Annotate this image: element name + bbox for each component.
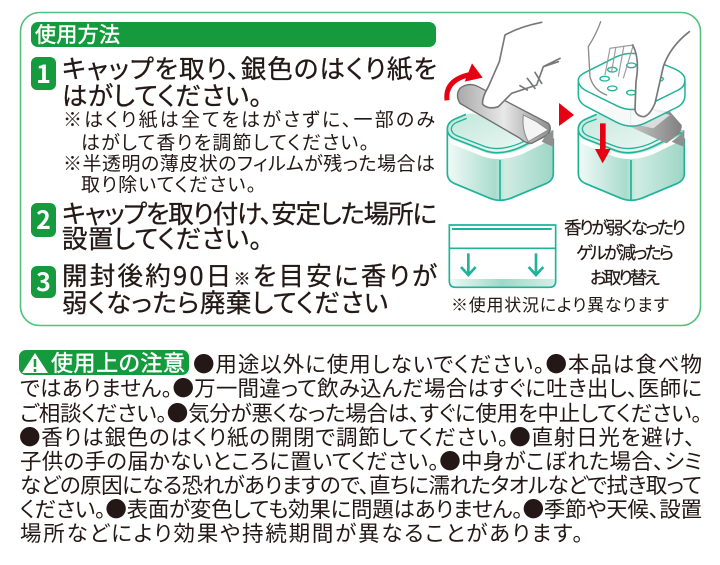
step 1 notes: ※はくり紙は全てをはがさずに、一部のみ: [63, 105, 435, 132]
icon: warning triangle: [22, 353, 48, 373]
precautions text: などの原因になる恐れがありますので、直ちに濡れたタオルなどで拭き取って: [20, 469, 702, 500]
badge: usage precautions: 使用上の注意: [51, 346, 185, 378]
replacement guidance text: ゲルが減ったら: [576, 240, 674, 265]
replacement guidance text: お取り替え: [590, 265, 660, 290]
step 2 badge: [31, 201, 56, 237]
step 1 notes: [63, 105, 435, 197]
step 1 notes: ※半透明の薄皮状のフィルムが残った場合は: [63, 149, 435, 176]
step 2 text: 設置してください。: [62, 219, 262, 256]
step 1 notes: 取り除いてください。: [81, 170, 256, 197]
step 2 text: キャップを取り付け、安定した場所に: [62, 194, 437, 231]
precautions text: ではありません。●万一間違って飲み込んだ場合はすぐに吐き出し、医師に: [20, 372, 702, 403]
step 1 notes: はがして香りを調節してください。: [81, 128, 369, 155]
icon: hand lifting cap: [588, 22, 689, 117]
footnote: ※使用状況により異なります: [451, 291, 669, 316]
precautions text: ください。●表面が変色しても効果に問題はありません。●季節や天候、設置: [20, 493, 702, 524]
replacement guidance text: [564, 215, 686, 290]
step 3 badge: [31, 263, 56, 299]
step 2 badge: 2: [36, 201, 51, 237]
step 1 badge: 1: [36, 55, 51, 91]
precautions text: 場所などにより効果や持続期間が異なることがあります。: [20, 517, 583, 548]
icon: hand peeling: [483, 22, 560, 108]
diagram: gel level indicator: [449, 225, 556, 287]
illustration: replacing the cap: [578, 22, 689, 200]
step 1 badge: [31, 55, 56, 91]
step 1 text: キャップを取り、銀色のはくり紙を: [62, 49, 437, 86]
step 2 text: [62, 194, 437, 256]
illustration: peeling the foil: [447, 22, 560, 200]
panel: usage instructions: [20, 12, 700, 326]
icon: translucent cap with holes: [578, 53, 685, 126]
icon: red triangle between steps: [559, 103, 574, 126]
step 3 text: 弱くなったら廃棄してください: [62, 283, 388, 320]
step 3 text: 開封後約90日※を目安に香りが: [62, 256, 437, 293]
step 3 badge: 3: [36, 263, 51, 299]
precautions text: ●用途以外に使用しないでください。●本品は食べ物: [193, 348, 702, 379]
precautions text: ●香りは銀色のはくり紙の開閉で調節してください。●直射日光を避け、: [19, 421, 695, 452]
icon: curved red arrow: [447, 63, 483, 100]
step 3 text: [62, 256, 437, 320]
icon: left down arrow: [461, 253, 476, 275]
replacement guidance text: 香りが弱くなったり: [564, 215, 686, 240]
step 1 text: はがしてください。: [62, 76, 262, 113]
step 1 text: [62, 49, 437, 113]
heading: usage instructions: 使用方法: [35, 19, 120, 49]
heading: usage instructions: [31, 19, 436, 49]
precautions text: 子供の手の届かないところに置いてください。●中身がこぼれた場合、シミ: [20, 445, 702, 476]
icon: right down arrow: [529, 253, 543, 275]
icon: red down arrow: [595, 123, 611, 163]
precautions text: ご相談ください。●気分が悪くなった場合は、すぐに使用を中止してください。: [20, 397, 702, 428]
precautions text: [19, 348, 702, 548]
